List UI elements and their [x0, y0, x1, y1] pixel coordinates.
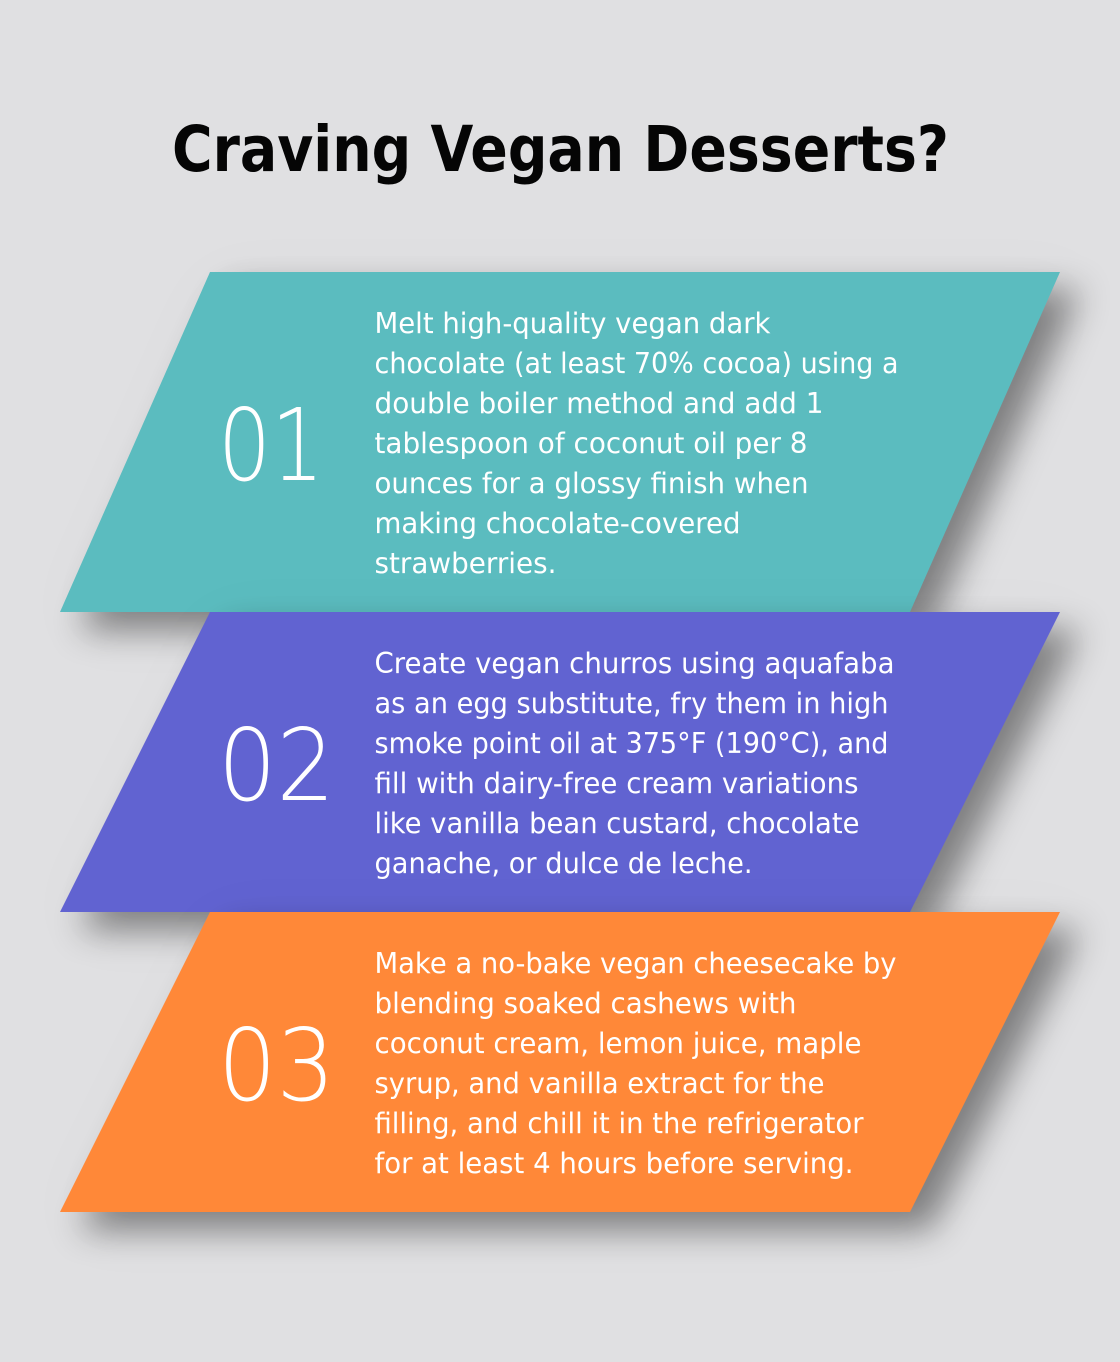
- step 02 text: fill with dairy-free cream variations: [374, 767, 858, 800]
- panel 02 background: [60, 612, 1060, 912]
- step 02 text: like vanilla bean custard, chocolate: [374, 807, 860, 840]
- step 01 text: Melt high-quality vegan dark: [374, 307, 771, 340]
- step 01 text: chocolate (at least 70% cocoa) using a: [374, 347, 898, 380]
- step 03 text: coconut cream, lemon juice, maple: [374, 1027, 862, 1060]
- panel 03 background: [60, 912, 1060, 1212]
- step 01 text: tablespoon of coconut oil per 8: [374, 427, 808, 460]
- panel 01 background: [60, 272, 1060, 612]
- step 02 text: as an egg substitute, fry them in high: [374, 687, 888, 720]
- step 02 text: ganache, or dulce de leche.: [374, 847, 752, 880]
- step 03 text: blending soaked cashews with: [374, 987, 796, 1020]
- step 02 text: [374, 647, 894, 880]
- step 01 text: [374, 307, 898, 580]
- step 03 text: for at least 4 hours before serving.: [374, 1147, 854, 1180]
- number 03: 03: [218, 1007, 335, 1124]
- step 01 text: making chocolate-covered: [374, 507, 740, 540]
- title: Craving Vegan Desserts?: [172, 113, 949, 186]
- step 03 text: [374, 947, 897, 1180]
- step 02 text: Create vegan churros using aquafaba: [374, 647, 894, 680]
- panel: step 01: [60, 272, 1060, 612]
- step 02 text: smoke point oil at 375°F (190°C), and: [374, 727, 888, 760]
- number 02: 02: [218, 707, 335, 824]
- step 03 text: Make a no-bake vegan cheesecake by: [374, 947, 897, 980]
- panel: step 02: [60, 612, 1060, 912]
- panel: step 03: [60, 912, 1060, 1212]
- step 01 text: double boiler method and add 1: [374, 387, 824, 420]
- step 03 text: syrup, and vanilla extract for the: [374, 1067, 824, 1100]
- step 01 text: ounces for a glossy finish when: [374, 467, 808, 500]
- step 03 text: filling, and chill it in the refrigerator: [374, 1107, 864, 1140]
- step 01 text: strawberries.: [374, 547, 556, 580]
- number 01: 01: [218, 387, 324, 504]
